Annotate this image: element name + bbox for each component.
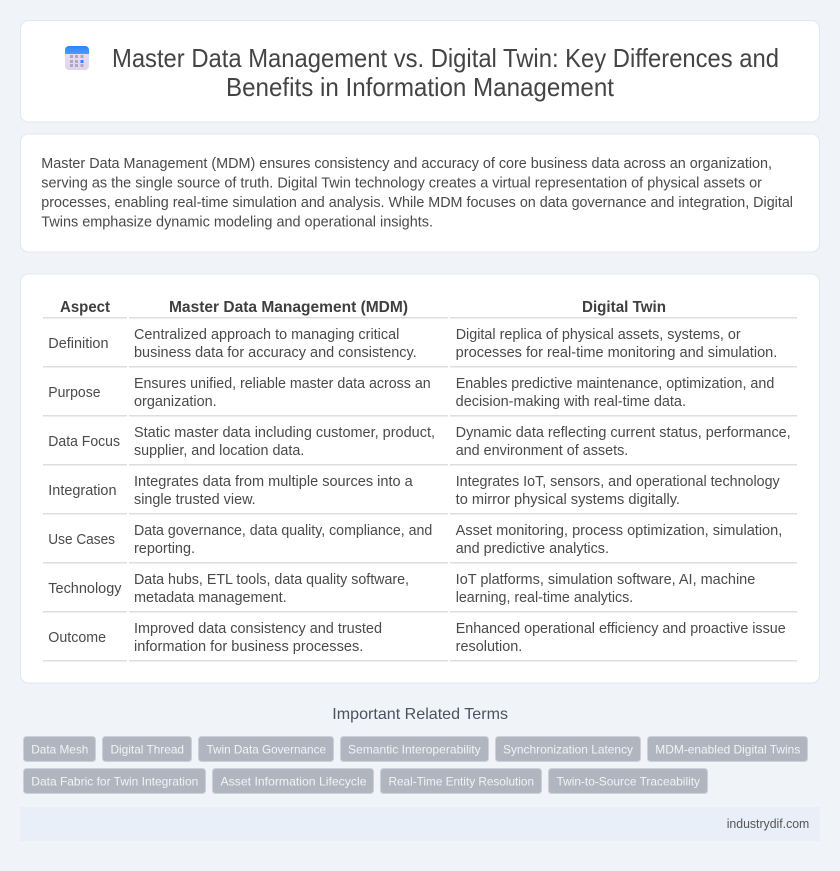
tag: [24, 736, 96, 762]
tag: [340, 736, 488, 762]
text block: introduction: processes, enabling real-time simulation and analysis. While MDM focuses on data governance and integration, Digital: [41, 195, 793, 211]
tag: [648, 736, 808, 762]
table row: Purpose: [48, 376, 774, 410]
table row: Definition: Digital replica of physical assets, systems, or: [456, 327, 741, 343]
table row: Data Focus: [48, 425, 791, 459]
title: Benefits in Information Management: [226, 74, 614, 102]
table row: Data Focus: Dynamic data reflecting current status, performance,: [456, 425, 791, 441]
table row: Outcome: [48, 621, 786, 655]
text block: introduction: Master Data Management (MDM) ensures consistency and accuracy of core business data across an organization,: [41, 156, 772, 172]
table row: Purpose: organization.: [134, 394, 217, 410]
table row: Use Cases: Asset monitoring, process optimization, simulation,: [456, 523, 782, 539]
table row: Purpose: decision-making with real-time data.: [456, 394, 686, 410]
table row: Outcome: Improved data consistency and trusted: [134, 621, 382, 637]
tag: [548, 768, 708, 794]
table row: Integration: Integration: [48, 483, 116, 499]
tag: Real-Time Entity Resolution: [388, 774, 534, 788]
table row: Purpose: Purpose: [48, 385, 100, 401]
table row: Definition: processes for real-time monitoring and simulation.: [456, 345, 777, 361]
table row: Definition: Centralized approach to managing critical: [134, 327, 399, 343]
tag: [24, 768, 206, 794]
table row: Use Cases: reporting.: [134, 541, 195, 557]
panel: header: [20, 20, 820, 122]
table row: Data Focus: Data Focus: [48, 434, 120, 450]
table row: Definition: business data for accuracy and consistency.: [134, 345, 417, 361]
tag: Data Fabric for Twin Integration: [31, 774, 198, 788]
table row: Technology: [48, 572, 755, 606]
tag: [380, 768, 542, 794]
tag: Semantic Interoperability: [348, 742, 481, 756]
text block: introduction: [41, 156, 793, 230]
table row: Outcome: information for business processes.: [134, 639, 363, 655]
tag: [496, 736, 640, 762]
table row: Definition: Definition: [48, 336, 108, 352]
table row: Purpose: Enables predictive maintenance, optimization, and: [456, 376, 774, 392]
table row: Technology: metadata management.: [134, 590, 287, 606]
title: [112, 45, 779, 102]
title: Master Data Management vs. Digital Twin: Key Differences and: [112, 45, 779, 73]
table row: Technology: Technology: [48, 581, 122, 597]
table row: Definition: [48, 327, 777, 361]
table row: Purpose: Ensures unified, reliable master data across an: [134, 376, 431, 392]
icon: calendar: [65, 46, 89, 70]
tag: Data Mesh: [31, 742, 88, 756]
table row: Integration: to mirror physical systems digitally.: [456, 492, 680, 508]
tag: [102, 736, 192, 762]
footer: industrydif.com: [727, 816, 809, 831]
tag: Twin-to-Source Traceability: [556, 774, 700, 788]
table row: Use Cases: and predictive analytics.: [456, 541, 609, 557]
heading: related terms: Important Related Terms: [332, 706, 508, 723]
panel: introduction: [20, 134, 820, 252]
table header: Master Data Management (MDM): [169, 299, 408, 316]
table row: Technology: learning, real-time analytics.: [456, 590, 633, 606]
table row: Outcome: resolution.: [456, 639, 522, 655]
tag: Twin Data Governance: [206, 742, 326, 756]
table row: Integration: Integrates data from multiple sources into a: [134, 474, 413, 490]
table header: [60, 299, 666, 316]
table row: Data Focus: Static master data including customer, product,: [134, 425, 435, 441]
table header: Aspect: [60, 299, 110, 316]
tag: [198, 736, 334, 762]
table row: Integration: Integrates IoT, sensors, and operational technology: [456, 474, 780, 490]
table row: Data Focus: and environment of assets.: [456, 443, 628, 459]
footer: [20, 807, 820, 841]
tag: Asset Information Lifecycle: [220, 774, 367, 788]
table row: Technology: IoT platforms, simulation software, AI, machine: [456, 572, 755, 588]
table row: Outcome: Outcome: [48, 630, 106, 646]
table row: Use Cases: Data governance, data quality, compliance, and: [134, 523, 432, 539]
table row: Integration: [48, 474, 780, 508]
tag: [212, 768, 374, 794]
tag: Synchronization Latency: [503, 742, 633, 756]
tags: related terms: [24, 736, 808, 794]
tag: MDM-enabled Digital Twins: [655, 742, 800, 756]
table header: Digital Twin: [582, 299, 666, 316]
table row: Use Cases: [48, 523, 782, 557]
table row: Technology: Data hubs, ETL tools, data quality software,: [134, 572, 409, 588]
tag: Digital Thread: [110, 742, 184, 756]
panel: comparison table: [20, 274, 820, 683]
table row: Integration: single trusted view.: [134, 492, 256, 508]
table row: Outcome: Enhanced operational efficiency and proactive issue: [456, 621, 786, 637]
table row: Use Cases: Use Cases: [48, 532, 115, 548]
text block: introduction: serving as the single source of truth. Digital Twin technology creates a virtual representation of physical assets or: [41, 176, 762, 192]
table row: Data Focus: supplier, and location data.: [134, 443, 304, 459]
text block: introduction: Twins emphasize dynamic modeling and operational insights.: [41, 214, 433, 230]
